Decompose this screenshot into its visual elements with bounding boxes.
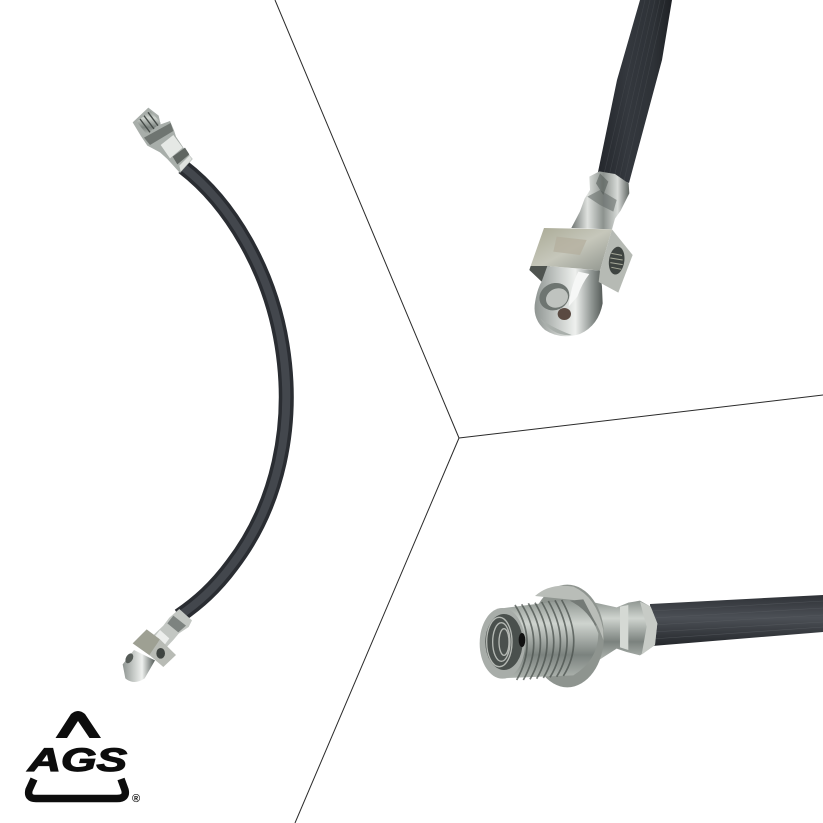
threaded port [607, 246, 626, 276]
hose section [650, 595, 823, 646]
hose body [179, 167, 286, 616]
divider lines [275, 0, 823, 823]
hose section [598, 0, 672, 183]
logo wordmark: AGS [27, 742, 128, 778]
metal fitting [529, 171, 633, 336]
block right face [599, 229, 633, 293]
barrel rim [480, 608, 525, 679]
bottom fitting [123, 609, 192, 682]
registered mark: ® [132, 793, 140, 805]
thread lines [515, 600, 574, 680]
under block [529, 266, 550, 283]
flange [531, 585, 604, 687]
side hole [535, 278, 574, 315]
hose ribs [604, 0, 665, 181]
threaded barrel [502, 600, 598, 678]
neck and collar [595, 601, 657, 659]
dome end [535, 266, 603, 336]
hose ribs [652, 601, 823, 639]
collar [571, 171, 629, 229]
logo top chevron [56, 711, 101, 738]
metal fitting [480, 585, 657, 687]
panel: top-right fitting close-up [529, 0, 672, 336]
panel: full brake hose [123, 108, 286, 682]
bore [485, 614, 523, 670]
panel: bottom-right fitting close-up [480, 585, 823, 687]
block top face [531, 228, 612, 271]
logo: AGS [27, 711, 140, 805]
logo bottom bracket [29, 779, 125, 798]
flange tab [570, 599, 597, 632]
top fitting [133, 108, 193, 173]
